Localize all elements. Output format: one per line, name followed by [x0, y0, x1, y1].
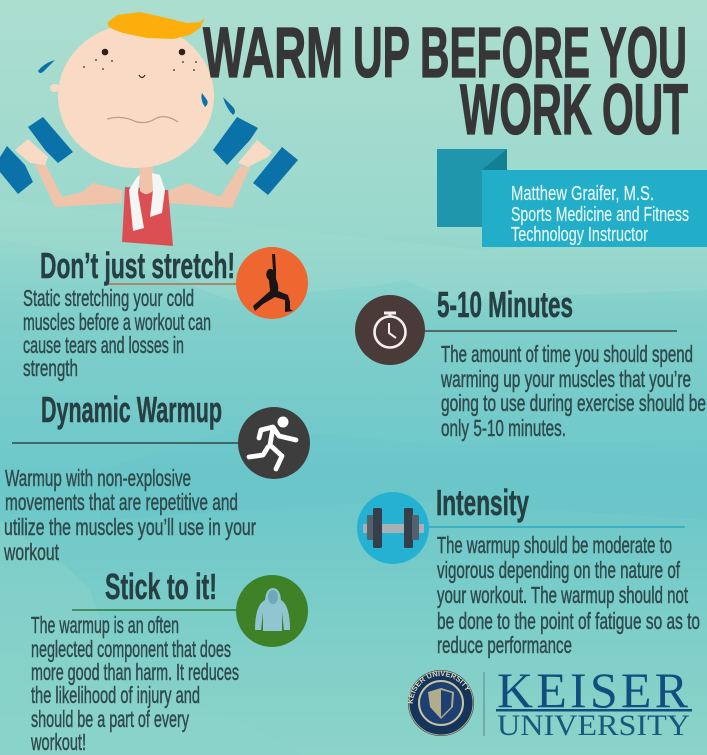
- freckles: [83, 59, 197, 71]
- section: intensity: reduce performance: [437, 632, 572, 658]
- section: intensity: Intensity: [436, 482, 529, 523]
- section: stick to it: the likelihood of injury and: [31, 682, 200, 708]
- section: stick to it: more good than harm. It reduces: [31, 659, 239, 685]
- author banner: Matthew Graifer, M.S.: [511, 183, 654, 205]
- logo: Keiser University: KEISER: [497, 662, 689, 718]
- neck: [139, 160, 153, 194]
- title: BEFORE: [420, 14, 590, 93]
- towel: [129, 173, 165, 231]
- shirt: [122, 187, 173, 246]
- logo: Keiser University: UNIVERSITY: [497, 709, 690, 742]
- arms: [35, 163, 122, 207]
- section: don't just stretch: Static stretching your cold: [23, 285, 194, 311]
- section: 5-10 minutes: 5-10 Minutes: [437, 284, 573, 325]
- section: dynamic warmup: movements that are repetitive and: [5, 489, 238, 515]
- section: stick to it: The warmup is an often: [31, 612, 179, 638]
- hair: [107, 12, 205, 39]
- section: don't just stretch: [23, 245, 308, 381]
- section: dynamic warmup: [3, 389, 310, 565]
- icon: hoodie: [236, 575, 308, 647]
- icon: barbell: [357, 492, 429, 564]
- section: don't just stretch: Don’t just stretch!: [40, 245, 235, 286]
- section: 5-10 minutes: [355, 284, 706, 441]
- section: stick to it: [30, 566, 308, 755]
- right dumbbell: [213, 117, 298, 195]
- seal: [408, 670, 474, 736]
- author banner: [437, 149, 707, 247]
- section: don't just stretch: muscles before a workout can: [23, 309, 211, 335]
- eyes: [102, 49, 108, 55]
- head: [58, 24, 214, 168]
- title: [203, 14, 688, 150]
- section: don't just stretch: strength: [23, 355, 78, 381]
- section: stick to it: Stick to it!: [105, 566, 217, 607]
- illustration: man lifting dumbbells: [0, 12, 298, 246]
- icon: yoga pose: [236, 247, 308, 319]
- title: WARM: [203, 14, 343, 93]
- left dumbbell: [0, 117, 73, 194]
- section: dynamic warmup: Dynamic Warmup: [41, 389, 222, 430]
- title: WORK: [460, 71, 592, 150]
- section: stick to it: workout!: [30, 729, 86, 755]
- seal: KEISER UNIVERSITY: [408, 670, 471, 704]
- section: 5-10 minutes: only 5-10 minutes.: [441, 415, 566, 441]
- nose and mouth: [139, 75, 145, 78]
- section: stick to it: should be a part of every: [31, 706, 189, 732]
- section: dynamic warmup: workout: [3, 539, 59, 565]
- author banner: Technology Instructor: [511, 224, 648, 246]
- logo: Keiser University: [408, 662, 692, 742]
- section: dynamic warmup: Warmup with non-explosive: [5, 465, 191, 491]
- icon: stopwatch: [355, 295, 425, 365]
- sweat drops: [38, 60, 235, 115]
- icon: runner: [238, 407, 310, 479]
- title: UP: [353, 14, 410, 93]
- section: don't just stretch: cause tears and losses in: [23, 332, 184, 358]
- section: dynamic warmup: utilize the muscles you’ll use in your: [4, 514, 256, 540]
- section: intensity: [357, 482, 700, 658]
- section: stick to it: neglected component that does: [31, 636, 231, 662]
